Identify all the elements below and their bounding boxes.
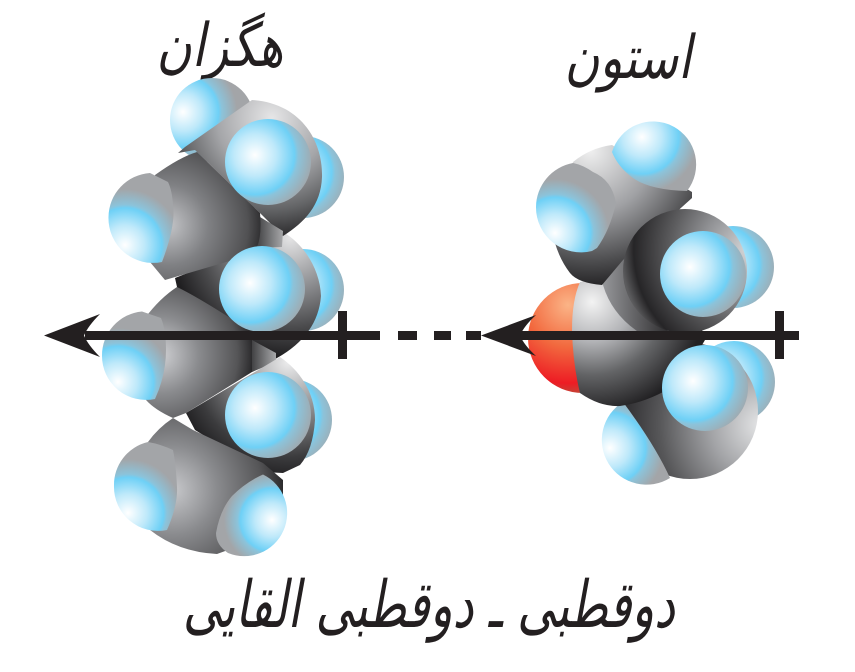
hydrogen: back right upper — [692, 226, 774, 308]
hydrogen: lower front — [662, 345, 748, 431]
hydrogen: top — [170, 78, 254, 162]
hydrogen: lower front — [225, 372, 311, 458]
dashed link between dipoles — [398, 331, 481, 340]
carbon: top right — [178, 100, 322, 236]
carbon: upper right methyl — [623, 209, 747, 333]
carbon: central carbonyl — [572, 270, 705, 406]
hydrogen: back right lower — [693, 341, 775, 423]
title: hexane: هگزان — [157, 11, 283, 81]
hexane molecule — [102, 78, 344, 556]
title: acetone: استون — [565, 23, 697, 94]
hydrogen: bottom right — [216, 474, 287, 556]
hydrogen: back right lower — [250, 379, 332, 461]
carbon: upper left — [150, 152, 261, 280]
oxygen atom — [528, 283, 638, 393]
hydrogen: top — [612, 121, 696, 191]
hydrogen: middle left — [102, 312, 166, 400]
connector: lower bond — [252, 340, 276, 372]
hydrogen: upper left — [536, 163, 616, 252]
carbon: bottom left — [148, 418, 283, 554]
acetone dipole arrow — [481, 311, 799, 359]
carbon: third right — [186, 357, 315, 473]
hydrogen: upper left — [108, 173, 174, 263]
hydrogen: bottom left — [602, 402, 670, 485]
hydrogen: back right middle — [262, 249, 344, 331]
acetone molecule — [528, 121, 775, 485]
carbon: bottom methyl — [622, 343, 758, 479]
carbon: upper left methyl — [555, 145, 692, 285]
connector: upper bond — [257, 217, 283, 248]
hydrogen: bottom left — [114, 442, 177, 531]
hydrogen: back right upper — [262, 136, 344, 218]
hydrogen: middle front — [219, 246, 305, 332]
caption: dipole - induced dipole: دوقطبی ـ دوقطبی القایی — [183, 567, 676, 643]
carbon: middle left — [145, 287, 252, 418]
hydrogen: upper front — [225, 119, 311, 205]
hydrogen: upper front — [660, 231, 746, 317]
carbon: second right — [175, 232, 321, 372]
hexane dipole arrow — [44, 311, 380, 359]
carbon: band behind upper right methyl — [600, 250, 670, 336]
